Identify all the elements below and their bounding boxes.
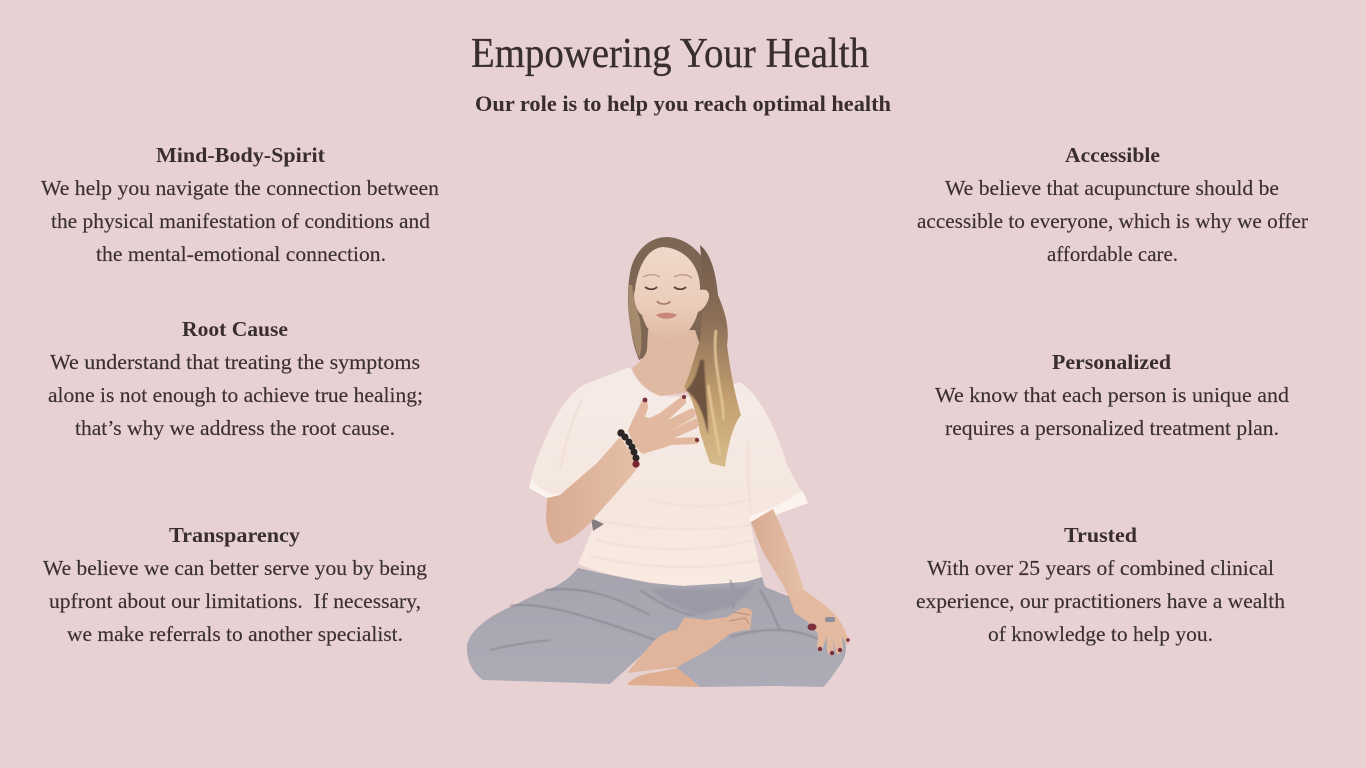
panel: Mind-Body-Spirit (41, 143, 439, 266)
forearm and elbow (546, 437, 640, 544)
text block: Accessible description: We believe that acupuncture should be (945, 176, 1279, 200)
text block: Root Cause description: that’s why we address the root cause. (75, 416, 395, 440)
text block: Mind-Body-Spirit description: the physical manifestation of conditions and (51, 209, 430, 233)
face (634, 247, 709, 341)
text block: Transparency description: upfront about our limitations. If necessary, (49, 589, 421, 613)
panel: Trusted (916, 523, 1285, 646)
text block: Personalized description (935, 383, 1289, 440)
eyebrows (643, 275, 692, 278)
heading: Mind-Body-Spirit: Mind-Body-Spirit (156, 143, 326, 167)
text block: Mind-Body-Spirit description: the mental-emotional connection. (96, 242, 386, 266)
panel: Accessible (917, 143, 1308, 266)
hand on chest (628, 397, 700, 454)
long hair right side (684, 245, 741, 467)
toes (729, 612, 750, 624)
upper calf and foot (627, 608, 752, 673)
heading: Personalized: Personalized (1052, 350, 1171, 374)
closed eyes (645, 287, 686, 289)
text block: Accessible description (917, 176, 1308, 266)
text block: Transparency description: We believe we can better serve you by being (43, 556, 427, 580)
beaded bracelet (617, 429, 640, 468)
trouser folds (490, 580, 820, 650)
left sleeve hem (529, 480, 560, 498)
text block: Trusted description: With over 25 years of combined clinical (927, 556, 1274, 580)
left-side hair strand (628, 285, 641, 358)
text block: Root Cause description: alone is not enough to achieve true healing; (48, 383, 423, 407)
heading: Transparency: Transparency (169, 523, 300, 547)
fingernails (643, 395, 699, 442)
text block: Mind-Body-Spirit description: We help you navigate the connection between (41, 176, 439, 200)
illustration: meditating woman (467, 237, 850, 687)
text block: Accessible description: affordable care. (1047, 242, 1178, 266)
right hand nails and ring (808, 617, 850, 655)
neck (632, 330, 700, 396)
right hand on knee (789, 590, 849, 655)
text block: Personalized description: We know that each person is unique and (935, 383, 1289, 407)
panel: Root Cause (48, 317, 423, 440)
text block: Trusted description: experience, our practitioners have a wealth (916, 589, 1285, 613)
nose (657, 301, 670, 304)
title: Empowering Your Health (471, 31, 869, 77)
lips (656, 313, 677, 319)
subtitle: Our role is to help you reach optimal health (475, 91, 891, 116)
hair shadow (686, 360, 708, 435)
text block: Accessible description: accessible to everyone, which is why we offer (917, 209, 1308, 233)
panel: Personalized (935, 350, 1289, 440)
lower calf and foot (627, 668, 699, 687)
shirt body (529, 367, 808, 586)
armpit shadow (591, 518, 604, 531)
text block: Transparency description: we make referrals to another specialist. (67, 622, 403, 646)
text block: Mind-Body-Spirit description (41, 176, 439, 266)
trousers (467, 568, 846, 687)
panel: Transparency (43, 523, 427, 646)
text block: Trusted description: of knowledge to help you. (988, 622, 1213, 646)
text block: Root Cause description (48, 350, 423, 440)
shirt shading (560, 400, 758, 567)
text block: Trusted description (916, 556, 1285, 646)
text block: Root Cause description: We understand that treating the symptoms (50, 350, 420, 374)
hair highlights (708, 330, 724, 455)
hair back (628, 237, 712, 360)
right arm (751, 509, 804, 600)
heading: Accessible: Accessible (1065, 143, 1160, 167)
text block: Personalized description: requires a personalized treatment plan. (945, 416, 1279, 440)
right sleeve hem (750, 490, 808, 522)
heading: Trusted: Trusted (1064, 523, 1137, 547)
trouser highlights (650, 585, 755, 615)
heading: Root Cause: Root Cause (182, 317, 288, 341)
text block: Transparency description (43, 556, 427, 646)
